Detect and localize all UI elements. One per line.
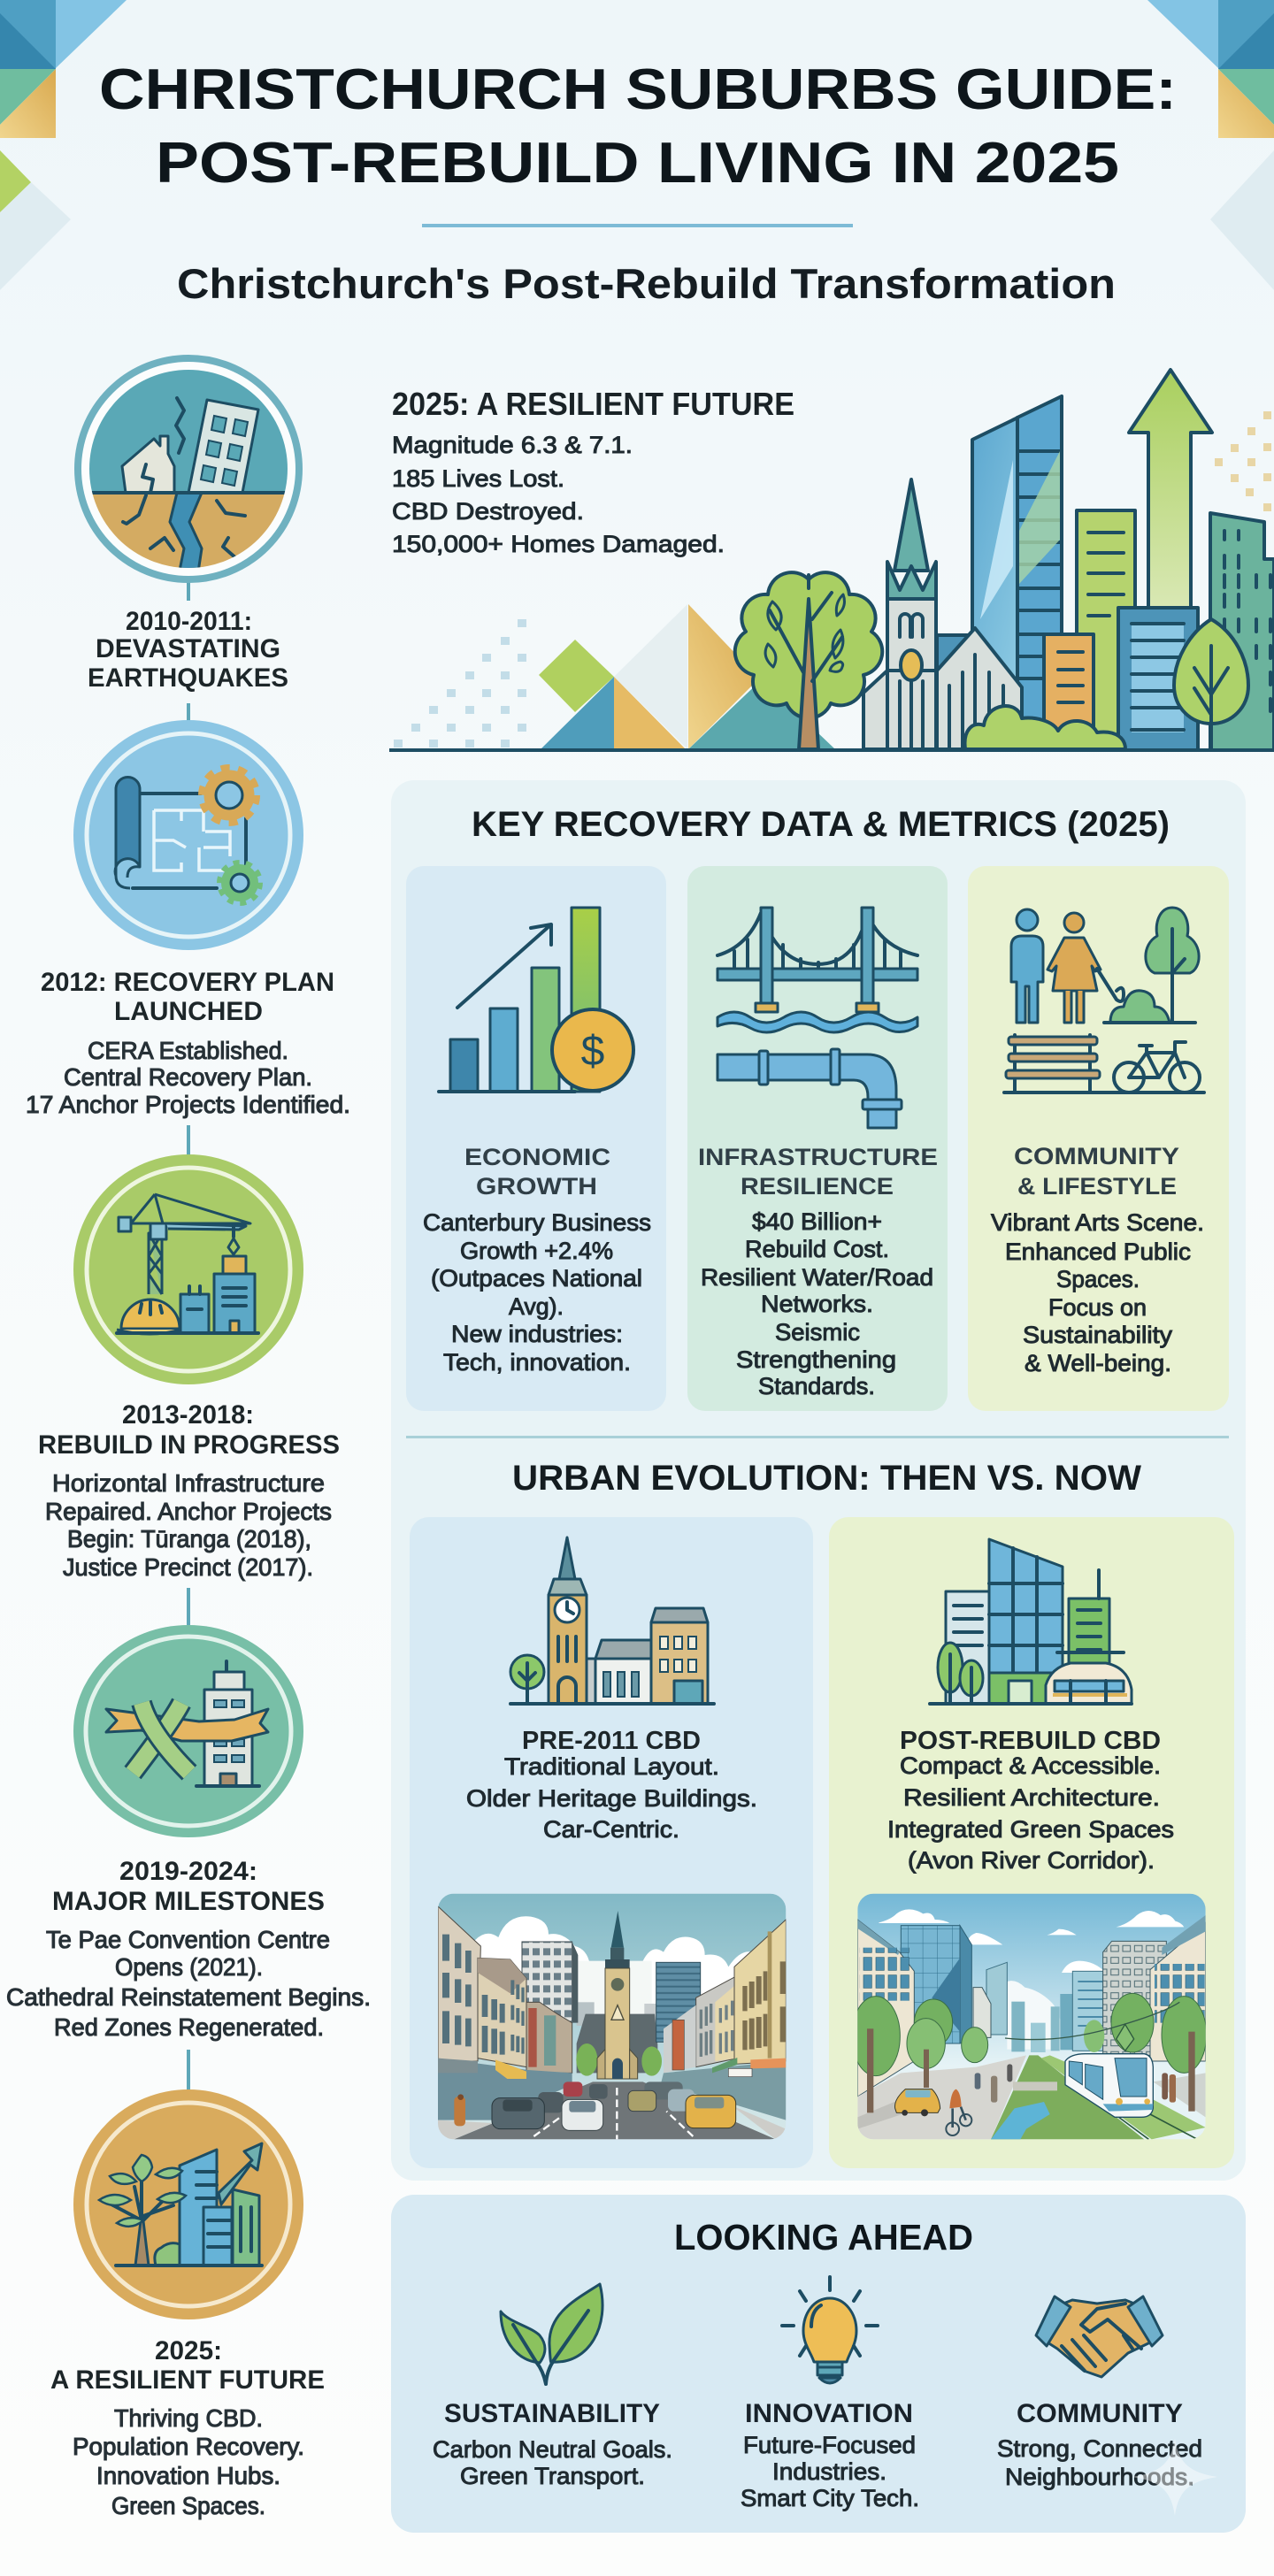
- text: post-rebuild CBD: [887, 1727, 1174, 1874]
- text: 2025 details: [73, 2404, 304, 2519]
- illustration: pre-2011 street scene: [438, 1894, 786, 2139]
- icon: ribbon cutting: [73, 1625, 303, 1837]
- text: community and lifestyle: & Well-being.: [1025, 1350, 1171, 1376]
- text: sustainability: Carbon Neutral Goals.: [433, 2436, 672, 2463]
- icon: handshake: [1036, 2296, 1163, 2377]
- text: pre-2011 CBD: Older Heritage Buildings.: [466, 1785, 757, 1812]
- text: community and lifestyle: [991, 1143, 1204, 1376]
- icon: earthquake: [78, 358, 301, 584]
- text: 2013-2018 details: Justice Precinct (2017).: [63, 1553, 313, 1581]
- card: community and lifestyle: [968, 866, 1229, 1411]
- text: pre-2011 CBD: [466, 1727, 757, 1843]
- text: infrastructure resilience: Strengthening: [736, 1346, 896, 1373]
- illustration: post-rebuild street scene: [852, 1894, 1207, 2139]
- ground line: [389, 748, 1274, 752]
- intro text block: 150,000+ Homes Damaged.: [392, 531, 725, 557]
- text: economic growth: New industries:: [451, 1321, 623, 1347]
- text: 2025 details: Innovation Hubs.: [96, 2462, 280, 2489]
- small tree: [1174, 619, 1248, 750]
- label: 2019-2024: MAJOR MILESTONES: [52, 1887, 325, 1916]
- church: [863, 479, 1022, 749]
- glass tower: [972, 396, 1062, 749]
- text: community: [997, 2399, 1202, 2490]
- text: post-rebuild CBD: POST-REBUILD CBD: [900, 1727, 1161, 1755]
- intro text block: CBD Destroyed.: [392, 498, 584, 525]
- teal building: [1210, 513, 1274, 750]
- icon: heritage buildings: [510, 1537, 714, 1704]
- text: 2012 details: 17 Anchor Projects Identified.: [26, 1091, 350, 1118]
- text: pre-2011 CBD: PRE-2011 CBD: [522, 1727, 701, 1755]
- label: 2025: [50, 2336, 325, 2395]
- label: 2010-2011: 2010-2011:: [126, 607, 252, 636]
- geometric shapes: [539, 604, 835, 749]
- intro text block: [392, 386, 794, 557]
- text: infrastructure resilience: Rebuild Cost.: [745, 1236, 889, 1262]
- text: 2013-2018 details: Repaired. Anchor Projects: [45, 1498, 332, 1525]
- timeline step 3: rebuild: [38, 1154, 340, 1581]
- text: community and lifestyle: Vibrant Arts Scene.: [991, 1209, 1204, 1236]
- green building: [1077, 510, 1135, 750]
- text: economic growth: Growth +2.4%: [460, 1238, 613, 1264]
- timeline step 4: milestones: [6, 1625, 371, 2041]
- text: 2019-2024 details: Opens (2021).: [115, 1953, 263, 1981]
- text: innovation: INNOVATION: [745, 2399, 913, 2428]
- label: 2012: [41, 968, 334, 1026]
- icon: growth chart with coin: $: [581, 1028, 604, 1075]
- label: 2013-2018: REBUILD IN PROGRESS: [38, 1430, 340, 1460]
- text: community: Strong, Connected: [997, 2435, 1202, 2462]
- text: economic growth: GROWTH: [476, 1173, 597, 1200]
- bush: [965, 706, 1125, 749]
- corner decoration: top right: [1147, 0, 1274, 290]
- icon: tree, buildings and arrow: [73, 2089, 303, 2319]
- text: post-rebuild CBD: Integrated Green Spaces: [887, 1816, 1174, 1843]
- text: economic growth: [423, 1144, 651, 1376]
- subtitle: Christchurch's Post-Rebuild Transformation: [177, 260, 1116, 307]
- label: 2013-2018: [38, 1400, 340, 1460]
- text: 2013-2018 details: Horizontal Infrastructure: [52, 1469, 325, 1497]
- timeline step 5: resilient future: [50, 2089, 325, 2519]
- heading: key recovery data: KEY RECOVERY DATA & METRICS (2025): [472, 805, 1170, 844]
- text: post-rebuild CBD: Compact & Accessible.: [900, 1752, 1161, 1779]
- label: 2012: LAUNCHED: [114, 997, 263, 1026]
- text: community: Neighbourhoods.: [1005, 2464, 1194, 2490]
- text: infrastructure resilience: [698, 1144, 938, 1399]
- label: 2025: A RESILIENT FUTURE: [50, 2365, 325, 2395]
- label: 2025: 2025:: [155, 2336, 222, 2365]
- card: pre-2011 CBD: [410, 1517, 813, 2168]
- text: sustainability: Green Transport.: [460, 2463, 645, 2489]
- text: community and lifestyle: Spaces.: [1056, 1266, 1140, 1292]
- label: 2019-2024: 2019-2024:: [119, 1857, 257, 1886]
- heading: looking ahead: LOOKING AHEAD: [674, 2217, 973, 2258]
- text: infrastructure resilience: Standards.: [758, 1373, 875, 1399]
- icon: leaves: [501, 2284, 602, 2384]
- icon: people, park, bench and bike: [1004, 908, 1204, 1092]
- text: 2025 details: Population Recovery.: [73, 2433, 304, 2460]
- orange building: [1044, 634, 1094, 750]
- text: community and lifestyle: Enhanced Public: [1005, 1238, 1191, 1265]
- column: community: [997, 2296, 1202, 2490]
- text: infrastructure resilience: $40 Billion+: [752, 1208, 882, 1235]
- text: innovation: Smart City Tech.: [741, 2485, 919, 2511]
- skyline illustration: [389, 370, 1274, 752]
- timeline step 2: recovery plan: [26, 720, 350, 1118]
- title: POST-REBUILD LIVING IN 2025: [156, 130, 1119, 195]
- intro text block: Magnitude 6.3 & 7.1.: [392, 432, 633, 458]
- text: economic growth: Canterbury Business: [423, 1209, 651, 1236]
- gold dot pattern: [1215, 411, 1271, 511]
- text: 2025 details: Green Spaces.: [111, 2492, 265, 2519]
- card: economic growth: [406, 866, 666, 1411]
- label: 2010-2011: EARTHQUAKES: [88, 663, 288, 693]
- intro text block: 2025: A RESILIENT FUTURE: [392, 386, 794, 422]
- text: 2025 details: Thriving CBD.: [114, 2404, 263, 2432]
- blue building: [1118, 608, 1198, 750]
- text: post-rebuild CBD: (Avon River Corridor).: [908, 1847, 1155, 1874]
- text: economic growth: (Outpaces National: [431, 1265, 642, 1292]
- text: sustainability: SUSTAINABILITY: [444, 2399, 660, 2428]
- text: innovation: Future-Focused: [743, 2432, 916, 2458]
- text: innovation: [741, 2399, 919, 2511]
- column: sustainability: [433, 2284, 672, 2489]
- icon: modern buildings and tram: [930, 1539, 1132, 1704]
- text: economic growth: Avg).: [509, 1293, 564, 1320]
- card: post-rebuild CBD: [829, 1517, 1234, 2168]
- text: 2012 details: Central Recovery Plan.: [64, 1063, 312, 1091]
- text: infrastructure resilience: Networks.: [761, 1291, 873, 1317]
- heading: urban evolution: URBAN EVOLUTION: THEN VS. NOW: [512, 1459, 1141, 1498]
- corner decoration: top left: [0, 0, 127, 290]
- label: 2010-2011: DEVASTATING: [96, 634, 280, 663]
- blue dot pattern: [394, 619, 526, 748]
- text: infrastructure resilience: INFRASTRUCTURE: [698, 1144, 938, 1170]
- title: [99, 57, 1177, 195]
- label: 2012: 2012: RECOVERY PLAN: [41, 968, 334, 997]
- text: innovation: Industries.: [772, 2458, 886, 2485]
- title: CHRISTCHURCH SUBURBS GUIDE:: [99, 57, 1177, 121]
- text: pre-2011 CBD: Car-Centric.: [543, 1816, 679, 1843]
- growth arrow: [1129, 370, 1212, 619]
- sparkle: [1132, 2438, 1217, 2516]
- intro text block: 185 Lives Lost.: [392, 465, 564, 492]
- icon: bridge and pipe: [718, 908, 917, 1128]
- text: 2019-2024 details: Red Zones Regenerated.: [54, 2013, 324, 2041]
- label: 2019-2024: [52, 1857, 325, 1916]
- icon: growth chart with coin: [439, 908, 633, 1092]
- text: post-rebuild CBD: Resilient Architecture.: [903, 1784, 1160, 1811]
- text: economic growth: ECONOMIC: [464, 1144, 610, 1170]
- text: community and lifestyle: Focus on: [1048, 1294, 1147, 1321]
- label: 2013-2018: 2013-2018:: [122, 1400, 254, 1430]
- text: 2019-2024 details: Cathedral Reinstatement Begins.: [6, 1983, 371, 2011]
- panel: key recovery metrics and urban evolution: [391, 780, 1246, 2181]
- text: 2013-2018 details: [45, 1469, 332, 1581]
- text: 2019-2024 details: Te Pae Convention Centre: [46, 1926, 330, 1953]
- text: pre-2011 CBD: Traditional Layout.: [504, 1753, 719, 1780]
- text: 2012 details: [26, 1037, 350, 1118]
- text: community: COMMUNITY: [1017, 2399, 1183, 2428]
- text: economic growth: Tech, innovation.: [443, 1349, 631, 1376]
- text: 2013-2018 details: Begin: Tūranga (2018),: [67, 1525, 311, 1552]
- card: infrastructure resilience: [687, 866, 948, 1411]
- tree: [735, 572, 882, 749]
- icon: crane and hard hat: [73, 1154, 303, 1384]
- text: 2012 details: CERA Established.: [88, 1037, 288, 1064]
- icon: blueprint and gears: [73, 720, 303, 950]
- text: 2019-2024 details: [6, 1926, 371, 2041]
- text: infrastructure resilience: RESILIENCE: [741, 1173, 894, 1200]
- text: infrastructure resilience: Seismic: [775, 1319, 860, 1346]
- timeline step 1: earthquakes: [78, 358, 301, 693]
- column: innovation: [741, 2277, 919, 2511]
- label: 2010-2011: [88, 607, 288, 693]
- text: community and lifestyle: Sustainability: [1023, 1322, 1173, 1348]
- icon: light bulb: [782, 2277, 878, 2383]
- text: community and lifestyle: & LIFESTYLE: [1017, 1173, 1177, 1200]
- text: infrastructure resilience: Resilient Water/Road: [701, 1264, 933, 1291]
- text: sustainability: [433, 2399, 672, 2489]
- timeline connectors: [187, 579, 190, 2090]
- panel: looking ahead: [391, 2195, 1246, 2533]
- text: community and lifestyle: COMMUNITY: [1014, 1143, 1179, 1169]
